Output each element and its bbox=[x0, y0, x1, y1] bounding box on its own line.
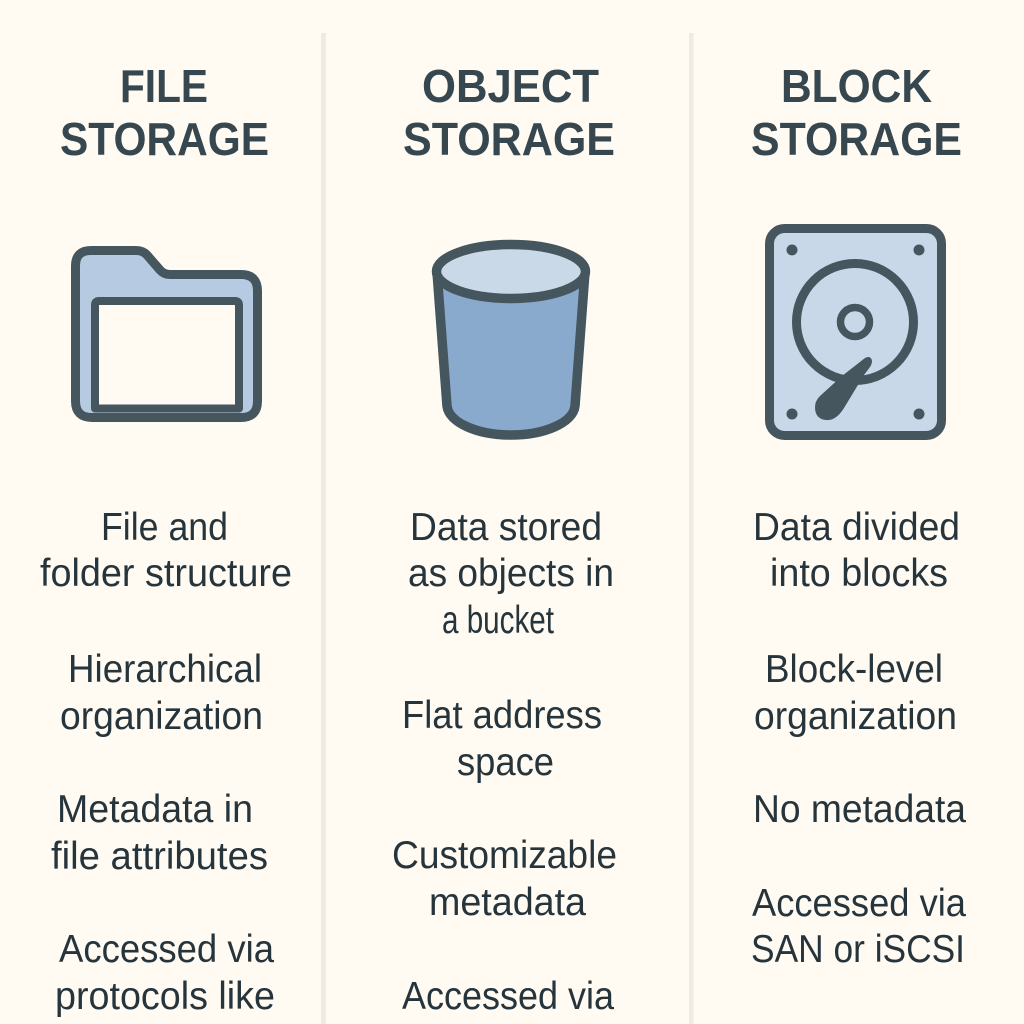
panel: block storage bbox=[751, 60, 967, 971]
heading: file storage: FILE bbox=[120, 60, 208, 112]
heading: object storage bbox=[403, 60, 615, 165]
text: accessed via: Accessed via bbox=[402, 975, 615, 1018]
icon: folder bbox=[76, 250, 258, 418]
text: hierarchical organization bbox=[60, 648, 263, 738]
text: data divided into blocks: into blocks bbox=[770, 552, 948, 595]
text: hierarchical organization: organization bbox=[60, 695, 263, 738]
text: metadata in file attributes: file attributes bbox=[51, 835, 268, 878]
text: no metadata: No metadata bbox=[753, 788, 967, 831]
heading: block storage: BLOCK bbox=[781, 60, 932, 112]
text: data stored as objects in a bucket: as objects in bbox=[408, 552, 614, 595]
text: accessed via protocols like bbox=[55, 928, 275, 1018]
text: hierarchical organization: Hierarchical bbox=[68, 648, 262, 691]
text: block-level organization: organization bbox=[754, 695, 957, 738]
heading: object storage: STORAGE bbox=[403, 113, 615, 165]
text: file and folder structure: folder structure bbox=[40, 552, 292, 595]
heading: block storage bbox=[751, 60, 962, 165]
text: flat address space bbox=[402, 694, 602, 784]
text: accessed via san or iscsi: SAN or iSCSI bbox=[751, 928, 965, 971]
panel: object storage bbox=[392, 60, 617, 1018]
text: flat address space: Flat address bbox=[402, 694, 602, 737]
text: accessed via san or iscsi bbox=[751, 882, 967, 971]
text: metadata in file attributes bbox=[51, 788, 268, 878]
text: customizable metadata: metadata bbox=[429, 881, 587, 924]
icon: bucket bbox=[436, 244, 586, 435]
text: data divided into blocks: Data divided bbox=[753, 506, 960, 549]
heading: file storage bbox=[60, 60, 269, 165]
text: accessed via san or iscsi: Accessed via bbox=[752, 882, 967, 925]
heading: object storage: OBJECT bbox=[422, 60, 599, 112]
heading: block storage: STORAGE bbox=[751, 113, 962, 165]
text: block-level organization bbox=[754, 648, 957, 738]
text: flat address space: space bbox=[457, 741, 554, 784]
icon: hard drive bbox=[770, 228, 942, 436]
text: data stored as objects in a bucket: Data stored bbox=[410, 506, 602, 549]
text: data divided into blocks bbox=[753, 506, 960, 595]
text: file and folder structure: File and bbox=[101, 506, 228, 549]
panel: file storage bbox=[40, 60, 292, 1018]
text: data stored as objects in a bucket: a bucket bbox=[442, 599, 554, 642]
text: customizable metadata bbox=[392, 834, 617, 924]
text: block-level organization: Block-level bbox=[765, 648, 943, 691]
text: metadata in file attributes: Metadata in bbox=[57, 788, 253, 831]
text: file and folder structure bbox=[40, 506, 292, 595]
text: accessed via protocols like: protocols like bbox=[55, 975, 275, 1018]
heading: file storage: STORAGE bbox=[60, 113, 269, 165]
text: customizable metadata: Customizable bbox=[392, 834, 617, 877]
text: data stored as objects in a bucket bbox=[408, 506, 614, 642]
text: accessed via protocols like: Accessed via bbox=[59, 928, 275, 971]
